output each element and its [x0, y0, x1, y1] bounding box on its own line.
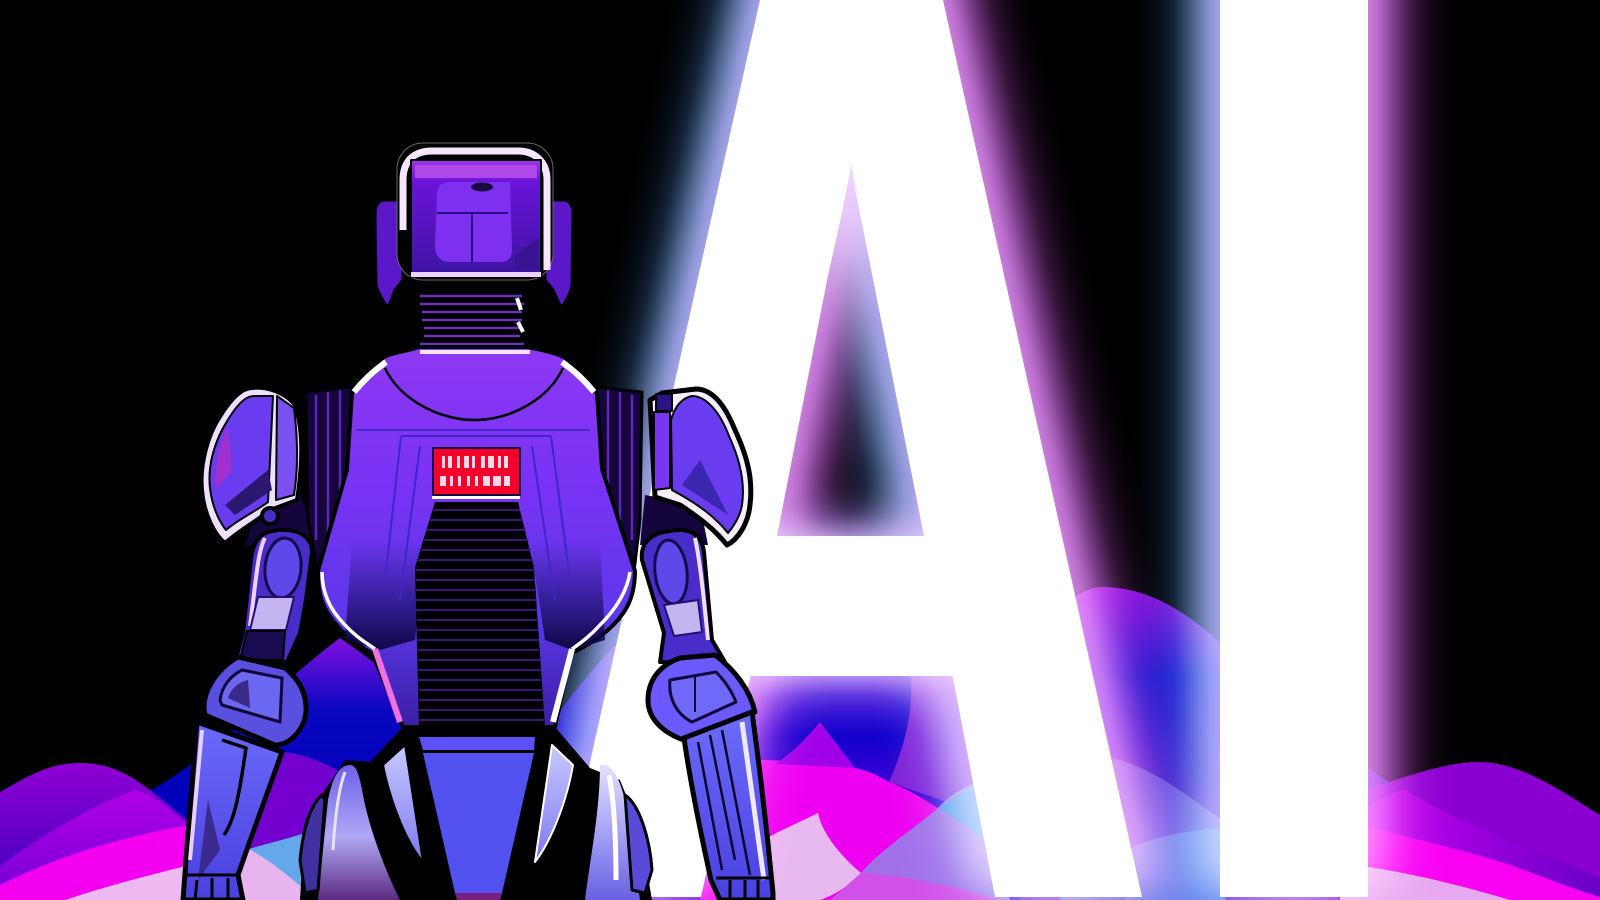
back vent [415, 502, 545, 727]
left shoulder pad [202, 388, 301, 543]
head with ear units [375, 143, 573, 308]
big AI lettering with glow [538, 0, 1437, 900]
torso side struts [306, 387, 642, 572]
torso [318, 347, 635, 727]
hips and thighs [300, 727, 652, 900]
red back display [432, 448, 520, 499]
right shoulder pad [650, 389, 751, 545]
neon waves [0, 587, 1600, 900]
left arm [183, 495, 316, 900]
robot seen from behind [183, 143, 773, 900]
right arm [640, 495, 773, 900]
neck [415, 285, 528, 350]
